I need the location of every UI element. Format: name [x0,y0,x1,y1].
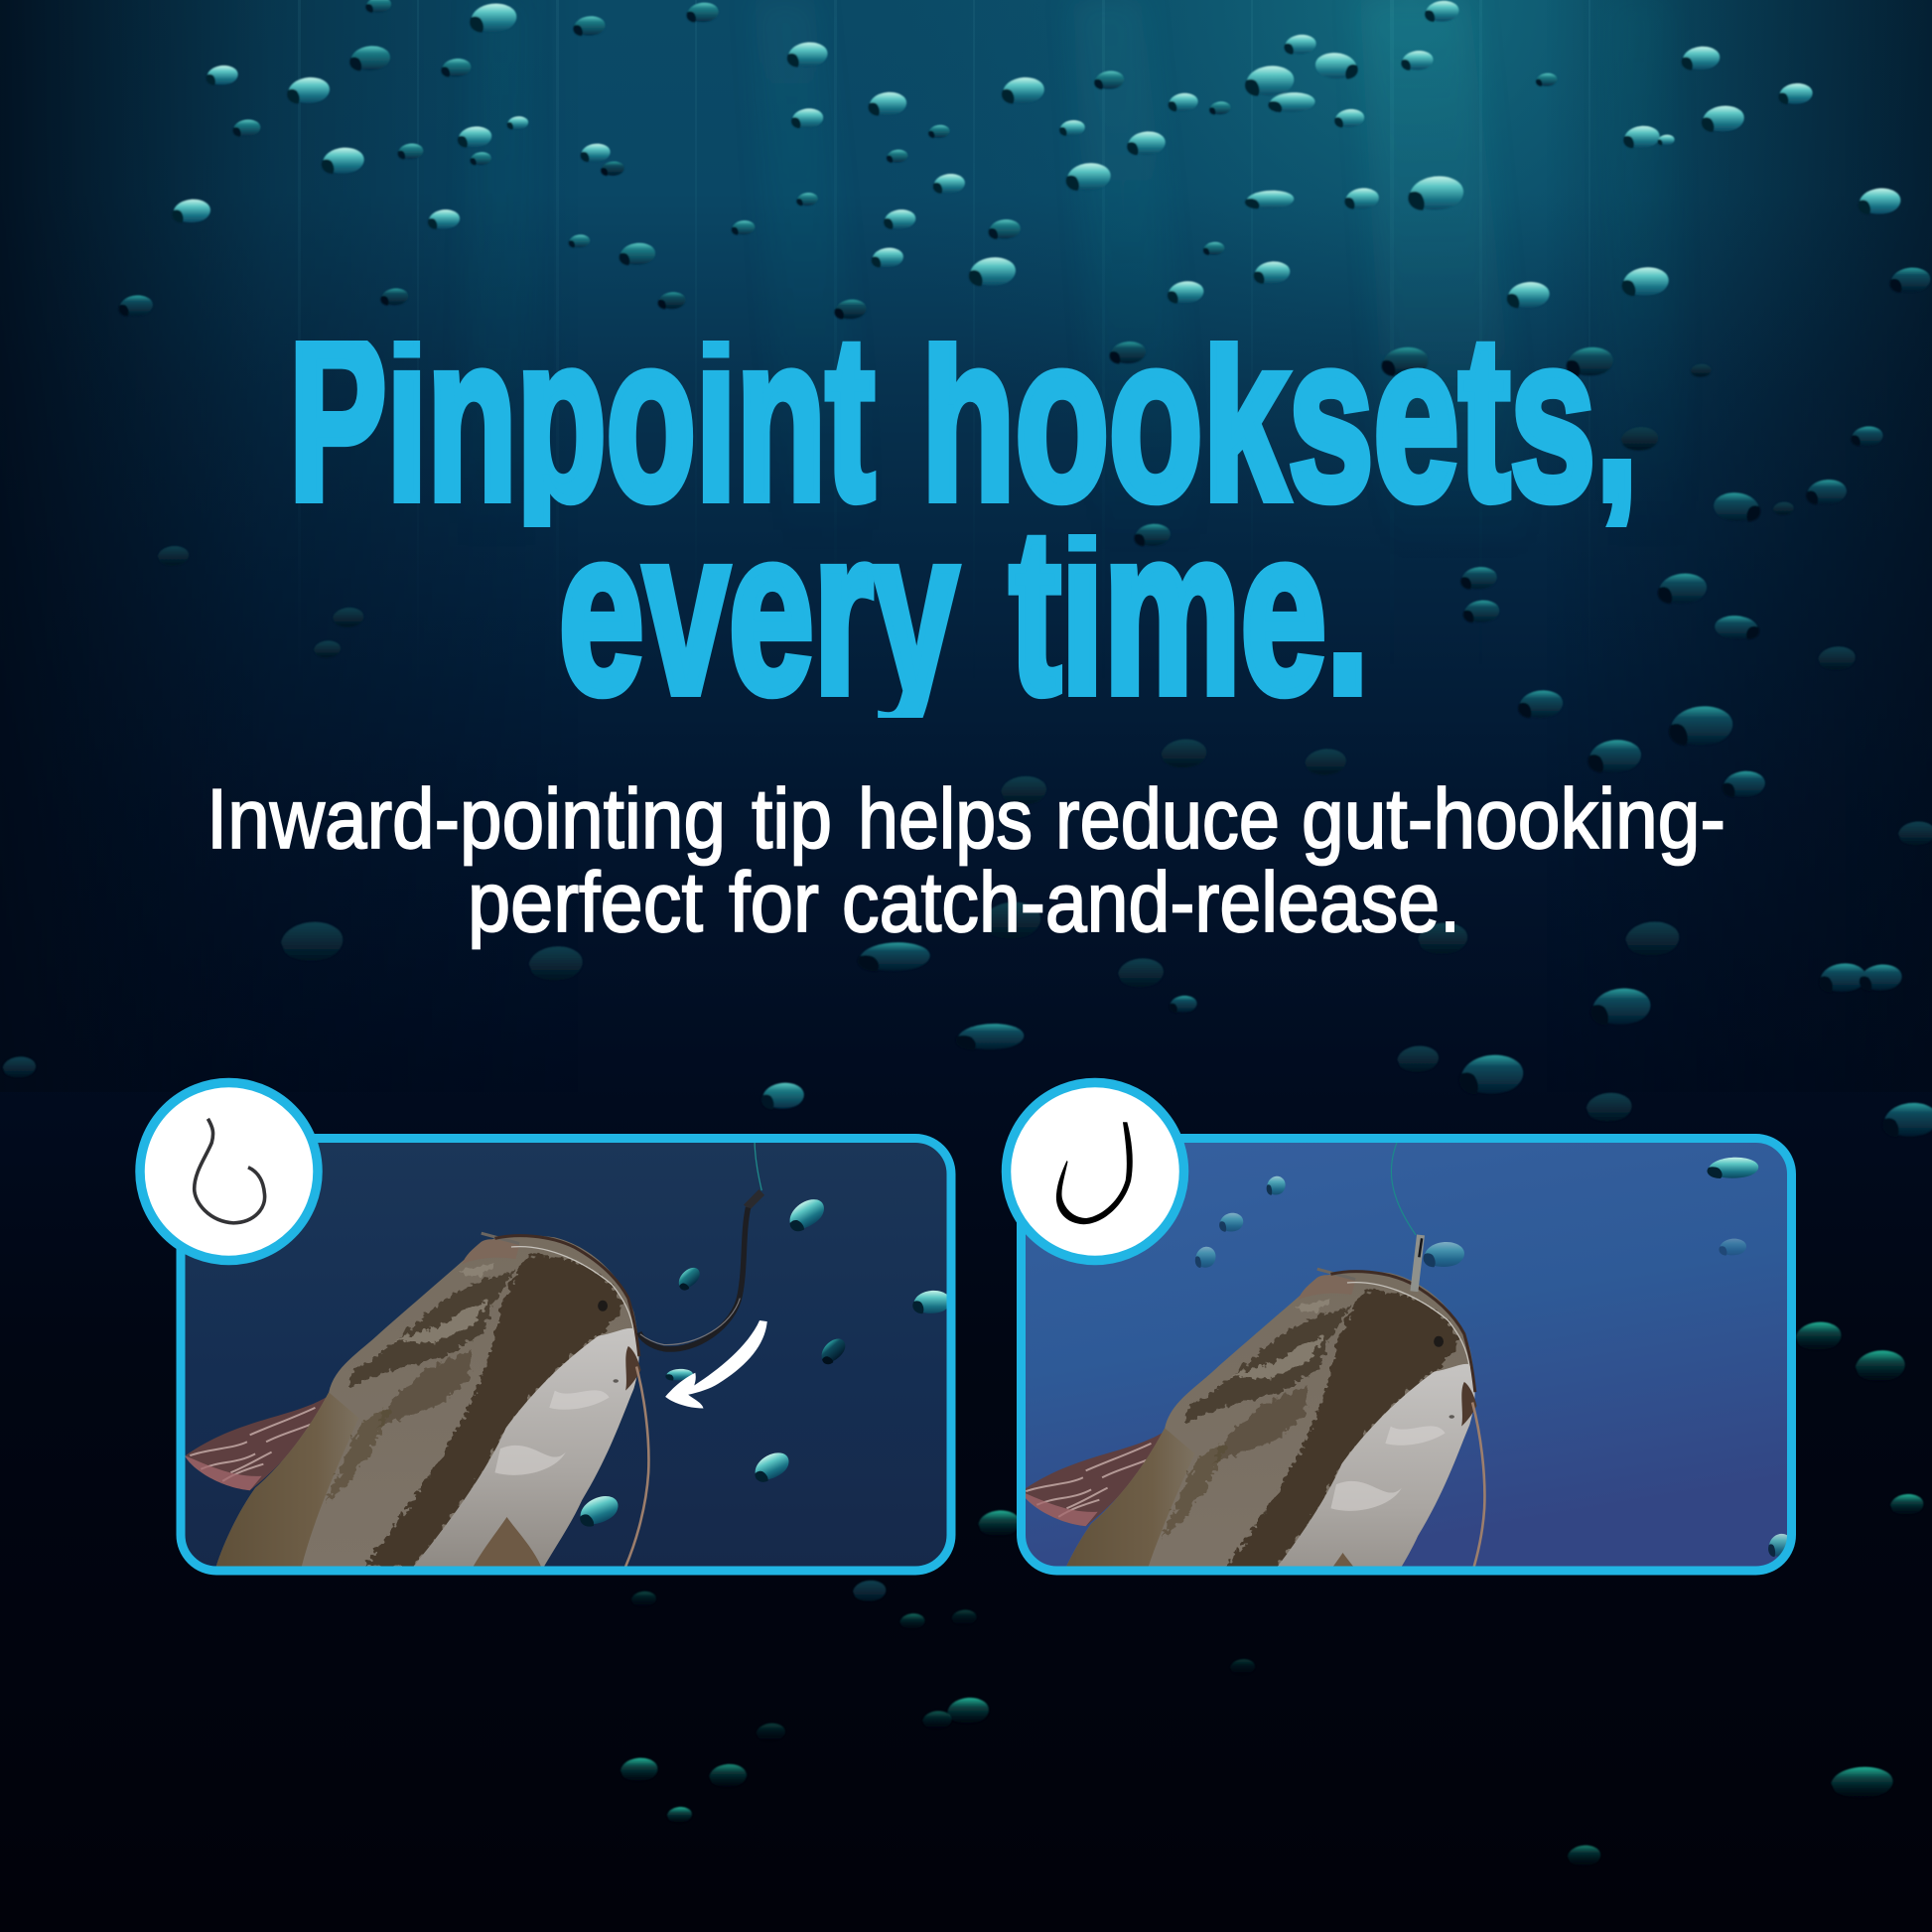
subtitle text: Inward-pointing [207,772,726,867]
subtitle text: gut-hooking- [1302,772,1725,867]
small fish in left panel [575,1194,950,1530]
title [296,341,1631,718]
hook with line [639,1143,761,1349]
panel: offset hook front view [1007,1082,1792,1602]
catfish right [1026,1267,1486,1567]
panel: circle hook side view with arrow [140,1082,951,1571]
small fish in right panel [1195,1158,1792,1557]
subtitle text: tip [752,772,832,867]
subtitle text: catch-and-release. [842,856,1460,950]
subtitle text [207,772,1725,950]
panel border [1021,1138,1791,1571]
panel border [181,1138,951,1571]
subtitle text: perfect [468,856,703,950]
hook with line [1391,1143,1422,1292]
subtitle text: reduce [1055,772,1280,867]
catfish left [185,1233,648,1567]
icon: circle hook badge [140,1082,318,1261]
title: every [559,481,958,742]
title: time. [1010,481,1369,742]
icon: offset hook badge [1007,1082,1183,1261]
subtitle text: for [729,856,819,950]
title: Pinpoint [289,287,875,548]
subtitle text: helps [858,772,1033,867]
arrow: points at hook tip [665,1320,767,1409]
